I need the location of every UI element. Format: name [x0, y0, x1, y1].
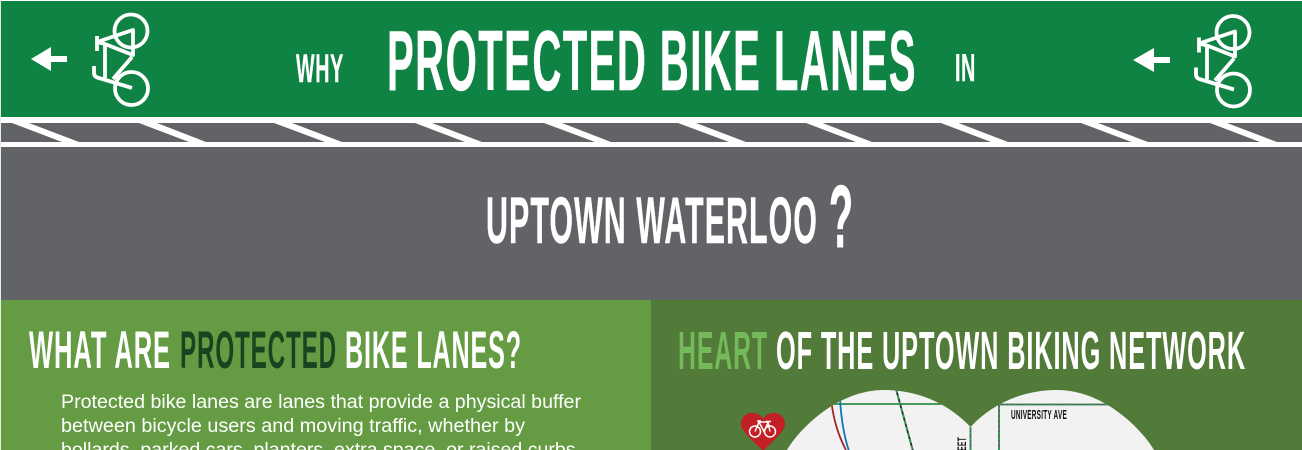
road with bike lane buffer markings [0, 117, 1302, 300]
page edge highlight [0, 0, 1, 450]
text: ? [829, 167, 853, 266]
panel: what are protected bike lanes: BIKE LANES? [345, 321, 522, 380]
subtitle [486, 167, 853, 266]
text: in: IN [955, 47, 976, 90]
icon: red heart with bicycle [741, 413, 785, 450]
panel: what are protected bike lanes [1, 300, 651, 450]
heading: heart of the uptown biking network: HEART [678, 321, 768, 381]
body text: Protected bike lanes are lanes that provide a physical buffer [61, 392, 582, 413]
heading: what are protected bike lanes: WHAT ARE [29, 321, 171, 380]
heading: what are protected bike lanes: PROTECTED [180, 321, 337, 380]
body text [61, 392, 582, 450]
green sign banner: WHY [296, 47, 344, 91]
heart-shaped map [787, 389, 1154, 450]
subtitle: UPTOWN WATERLOO [486, 183, 818, 257]
icon: left arrow [31, 47, 67, 71]
body text: between bicycle users and moving traffic, whether by [61, 416, 526, 437]
heart-shaped map: UNIVERSITY AVE [1011, 407, 1067, 422]
heading: what are protected bike lanes [29, 321, 522, 380]
icon: right bicycle [1196, 16, 1250, 106]
icon: left bicycle [94, 14, 148, 105]
green sign banner [1, 1, 1302, 117]
icon: right arrow [1133, 48, 1170, 72]
panel: heart of the uptown biking network [651, 300, 1302, 450]
